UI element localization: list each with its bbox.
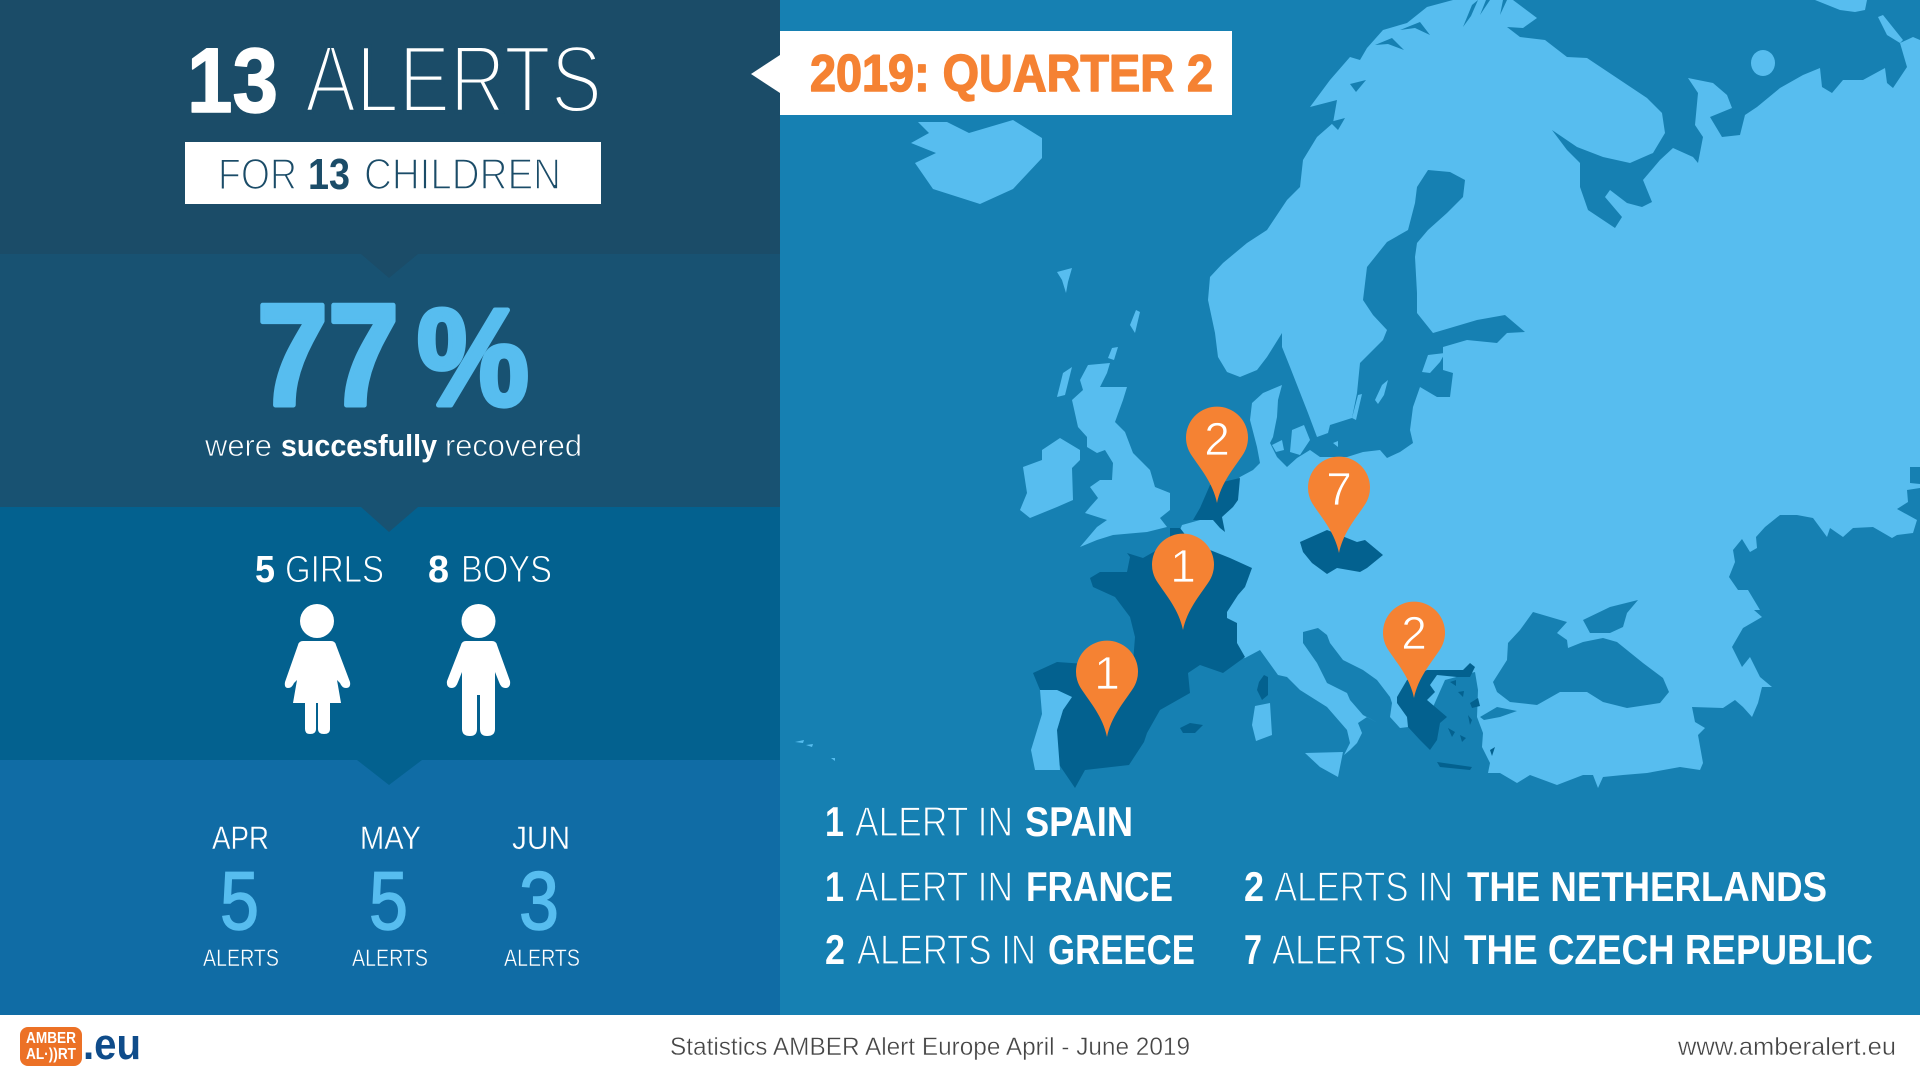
map pin: Czech Republic 7: 7 [1326, 463, 1352, 515]
source note: Statistics AMBER Alert Europe April - June 2019 [670, 1033, 1190, 1061]
sea: northern Norwegian fjords [1330, 0, 1507, 130]
list item: Spain: ALERT IN [855, 798, 1013, 845]
label: 5 girls [255, 549, 384, 591]
panel: recovery rate [0, 254, 780, 507]
list item: The Netherlands: ALERTS IN [1274, 863, 1453, 910]
islands: Arctic coast, Kolguev and Novaya Zemlya [1815, 0, 1903, 43]
islands: Ireland [1020, 438, 1080, 518]
caption: were succesfully recovered: were [204, 428, 272, 463]
column: June: 3 [519, 854, 559, 947]
islands: Sardinia, Sicily and Atlantic specks [795, 703, 1343, 777]
list item: Greece: GREECE [1048, 926, 1195, 973]
map pin: Greece 2 [1383, 602, 1445, 698]
highlighted country: The Netherlands [1193, 478, 1240, 532]
list item: Greece: 2 [825, 926, 845, 973]
label: 8 boys [428, 549, 552, 591]
panel: total alerts [0, 0, 780, 254]
heading: 13 alerts [187, 26, 602, 133]
caption: were succesfully recovered [204, 428, 582, 463]
label box: for 13 children: FOR [218, 150, 297, 199]
list item: Spain: SPAIN [1025, 798, 1133, 845]
logo: AMBER ALERT .eu: AL·))RT [26, 1046, 76, 1063]
map pin: Spain 1: 1 [1094, 647, 1120, 699]
big number: 77 percent [257, 274, 529, 436]
label: 8 boys: 8 [428, 549, 449, 591]
list item: France: FRANCE [1026, 863, 1173, 910]
heading: 13 alerts: 13 [187, 30, 278, 132]
map pin: Greece 2: 2 [1401, 607, 1427, 659]
list item: Spain: 1 [825, 798, 844, 845]
list item: The Czech Republic: THE CZECH REPUBLIC [1464, 926, 1873, 973]
icon: boy [447, 604, 510, 736]
list item: Greece [825, 926, 1195, 973]
label: 8 boys: BOYS [461, 549, 552, 591]
website: www.amberalert.eu [1677, 1033, 1896, 1061]
map pin: The Netherlands 2 [1186, 407, 1248, 503]
country list [825, 798, 1873, 973]
icon: girl [285, 604, 350, 734]
highlighted countries: France and Spain [1033, 528, 1252, 788]
sea: Black Sea [1493, 612, 1669, 708]
islands: Corsica and Mallorca [1180, 675, 1268, 733]
column: May [352, 820, 428, 972]
list item: The Czech Republic: ALERTS IN [1272, 926, 1451, 973]
column: June [504, 820, 580, 972]
label box: for 13 children: CHILDREN [364, 150, 561, 199]
quarter tag: 2019: QUARTER 2 [810, 45, 1213, 103]
map pin: France 1 [1152, 534, 1214, 630]
big number: 77 percent: % [417, 281, 529, 435]
map pin: The Netherlands 2: 2 [1204, 413, 1230, 465]
list item: France: ALERT IN [855, 863, 1013, 910]
quarter tag [751, 31, 1232, 115]
list item: Spain [825, 798, 1133, 845]
arrow: pointer from second panel [361, 507, 418, 532]
heading: 13 alerts: ALERTS [305, 26, 602, 133]
list item: The Czech Republic [1244, 926, 1873, 973]
map pin: Spain 1 [1076, 641, 1138, 737]
highlighted country: Czech Republic [1300, 530, 1383, 574]
list item: The Netherlands: 2 [1244, 863, 1264, 910]
map of Europe [795, 0, 1920, 788]
column: May: MAY [360, 820, 421, 856]
column: April [203, 820, 279, 972]
label: 5 girls: 5 [255, 549, 275, 591]
highlighted country: Greece [1397, 663, 1495, 770]
list item: The Netherlands [1244, 863, 1827, 910]
footer [0, 1015, 1920, 1080]
column: June: ALERTS [504, 945, 580, 972]
caption: were succesfully recovered: recovered [445, 428, 582, 463]
islands: small northern and Baltic islands [1057, 268, 1445, 455]
logo: AMBER ALERT .eu: AMBER [26, 1030, 76, 1047]
column: May: ALERTS [352, 945, 428, 972]
label: 5 girls: GIRLS [285, 549, 384, 591]
label box: for 13 children: 13 [308, 150, 350, 199]
sea: Sea of Azov [1583, 600, 1638, 633]
islands: Great Britain [1072, 363, 1170, 547]
islands: Iceland [911, 120, 1042, 204]
column: April: ALERTS [203, 945, 279, 972]
caption: were succesfully recovered: succesfully [281, 428, 438, 463]
column: April: 5 [220, 854, 259, 947]
panel: alerts per month [0, 760, 780, 1016]
big number: 77 percent: 77 [257, 274, 399, 436]
map pin: Czech Republic 7 [1308, 457, 1370, 553]
logo: AMBER ALERT .eu: .eu [83, 1020, 141, 1069]
column: May: 5 [369, 854, 408, 947]
column: June: JUN [512, 820, 570, 856]
list item: France [825, 863, 1173, 910]
land mass: mainland Europe [1180, 0, 1920, 788]
arrow: pointer from first panel [361, 254, 418, 278]
arrow: pointer from third panel [357, 760, 422, 785]
sea: Sea of Marmara [1480, 707, 1517, 720]
Portugal [1031, 690, 1072, 770]
map pin: France 1: 1 [1170, 540, 1196, 592]
islands: Kolguev [1751, 50, 1775, 76]
panel: girls and boys [0, 507, 780, 760]
column: April: APR [212, 820, 269, 856]
list item: Greece: ALERTS IN [857, 926, 1036, 973]
list item: France: 1 [825, 863, 844, 910]
list item: The Czech Republic: 7 [1244, 926, 1262, 973]
list item: The Netherlands: THE NETHERLANDS [1467, 863, 1827, 910]
label box: for 13 children [185, 142, 601, 204]
logo: AMBER ALERT .eu [20, 1020, 141, 1069]
